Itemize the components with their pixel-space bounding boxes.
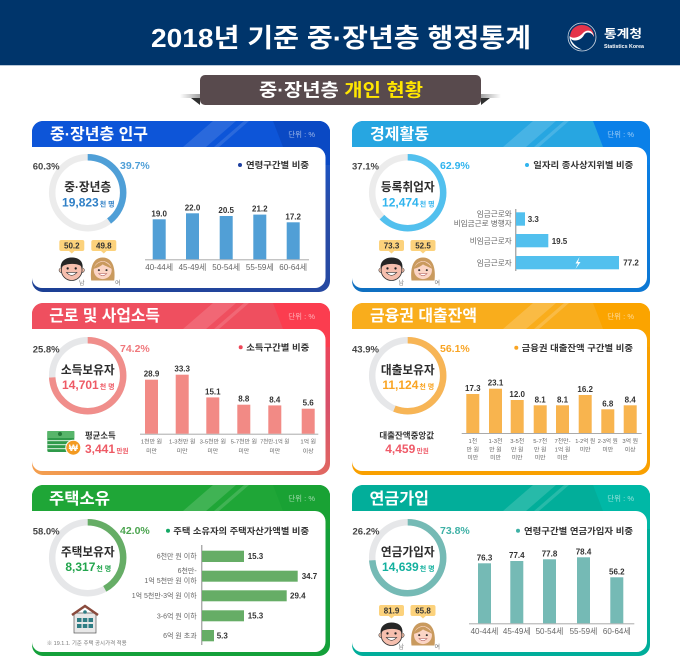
- average income: 평균소득: [85, 431, 116, 441]
- panel heading: 근로 및 사업소득: [49, 307, 160, 325]
- bar chart: 5.3: [217, 632, 228, 640]
- bar chart: 임금근로와: [477, 209, 512, 219]
- bar chart: 6천만-: [178, 566, 197, 575]
- gender ratio: 여: [434, 643, 440, 651]
- bar chart: 임금근로자: [477, 258, 512, 267]
- logo text: [604, 26, 645, 50]
- donut chart: 대출보유자: [381, 363, 435, 377]
- bar chart: [462, 379, 642, 462]
- chart title: 일자리 종사상지위별 비중: [533, 159, 633, 170]
- donut chart: 56.1%: [440, 343, 470, 355]
- donut chart: 등록취업자: [381, 180, 435, 194]
- gender ratio: 50.2: [64, 242, 80, 250]
- bar chart: 15.3: [248, 552, 264, 561]
- chart title: 연령구간별 비중: [246, 159, 309, 170]
- bar chart: 55-59세: [570, 627, 597, 636]
- bar chart: 60-64세: [603, 627, 631, 636]
- donut chart: 73.8%: [440, 525, 470, 537]
- bar chart: 1-3천만 원: [169, 438, 195, 446]
- bar chart: 34.7: [302, 572, 318, 581]
- donut chart: 26.2%: [352, 526, 380, 538]
- gender ratio: 남: [398, 643, 404, 651]
- logo text: 통계청: [604, 26, 642, 40]
- unit: 단위 : %: [288, 129, 315, 139]
- top banner: [0, 0, 680, 66]
- title: 2018년 기준 중·장년층 행정통계: [151, 23, 531, 53]
- footnote: ※ 19.1.1. 기준 주택 공시가격 적용: [47, 639, 127, 647]
- bar chart: 비임금근로자: [470, 237, 512, 246]
- bar chart: 이상: [303, 447, 314, 455]
- bar chart: 17.2: [285, 212, 302, 221]
- donut chart: 중·장년층: [64, 180, 111, 194]
- panel heading: 주택소유: [49, 490, 110, 508]
- donut chart: [33, 157, 150, 228]
- bar chart: 23.1: [488, 379, 504, 388]
- bar chart: 미만: [535, 454, 546, 462]
- bar chart: 미만: [238, 447, 250, 455]
- gender ratio: 여: [434, 279, 440, 287]
- panel heading: 금융권 대출잔액: [370, 307, 477, 325]
- bar chart: 5-7천만 원: [231, 438, 257, 446]
- donut chart: 주택보유자: [61, 546, 115, 559]
- panel: 중·장년층 인구: [32, 121, 330, 292]
- bar chart: 미만: [557, 454, 568, 462]
- gender ratio: 여: [115, 279, 121, 287]
- bar chart: 3-5천만 원: [200, 438, 226, 446]
- donut chart: 37.1%: [352, 162, 379, 172]
- panel heading: 중·장년층 인구: [50, 126, 148, 144]
- bar chart: 12.0: [509, 390, 526, 399]
- bar chart: 미만: [207, 447, 219, 455]
- bar chart: 50-54세: [212, 263, 240, 272]
- donut chart: 43.9%: [352, 344, 379, 356]
- bar chart: [469, 547, 634, 636]
- bar chart: 3.3: [528, 215, 539, 224]
- bar chart: 6천만 원 이하: [157, 552, 197, 560]
- bar chart: 7천만-: [554, 437, 571, 445]
- unit: 단위 : %: [288, 493, 315, 503]
- panel: 경제활동: [352, 121, 650, 292]
- bar chart: 33.3: [174, 365, 191, 374]
- bar chart: 22.0: [185, 203, 201, 212]
- gender ratio: 81.9: [384, 606, 400, 616]
- bar chart: 1천만 원: [141, 438, 162, 446]
- donut chart: [33, 522, 150, 593]
- bar chart: 1-2억 원: [575, 437, 595, 445]
- donut chart: [33, 340, 150, 411]
- bar chart: [132, 545, 318, 645]
- bar chart: 28.9: [144, 370, 160, 379]
- unit: 단위 : %: [607, 311, 634, 321]
- median loan balance: 대출잔액중앙값: [379, 431, 434, 441]
- bar chart: 45-49세: [503, 627, 531, 636]
- bar chart: 15.1: [205, 387, 221, 396]
- donut chart: 연금가입자: [381, 545, 435, 559]
- gender ratio: [59, 240, 121, 287]
- bar chart: 6억 원 초과: [163, 631, 197, 640]
- bar chart: 21.2: [252, 205, 268, 214]
- bar chart: 19.0: [151, 209, 168, 218]
- bar chart: 56.2: [609, 567, 625, 576]
- bar chart: 40-44세: [471, 627, 498, 636]
- bar chart: 7천만-1억 원: [260, 438, 289, 446]
- bar chart: [145, 203, 309, 272]
- donut chart: [352, 157, 470, 228]
- bar chart: 16.2: [577, 385, 594, 394]
- bar chart: 8.1: [557, 395, 569, 404]
- bar chart: 15.3: [248, 612, 264, 621]
- unit: 단위 : %: [607, 129, 634, 139]
- bar chart: 78.4: [576, 547, 592, 556]
- bar chart: 8.1: [535, 395, 546, 404]
- donut chart: 12,474천 명: [382, 195, 435, 209]
- bar chart: 2-3억 원: [598, 437, 618, 445]
- bar chart: 미만: [602, 445, 614, 453]
- bar chart: 77.4: [509, 551, 525, 560]
- bar chart: 40-44세: [145, 263, 173, 272]
- gender ratio: 남: [79, 279, 85, 287]
- bar chart: 77.2: [623, 258, 639, 268]
- bar chart: 60-64세: [279, 263, 307, 272]
- bar chart: 미만: [490, 454, 501, 462]
- median loan balance: 4,459만원: [385, 442, 429, 456]
- average income: [85, 431, 129, 456]
- chart title: 금융권 대출잔액 구간별 비중: [522, 342, 633, 353]
- bar chart: 8.4: [269, 395, 281, 404]
- bar chart: [140, 365, 318, 455]
- donut chart: 42.0%: [120, 525, 150, 537]
- bar chart: 미만: [512, 454, 523, 462]
- donut chart: 14,701천 명: [62, 378, 115, 392]
- bar chart: 미만: [580, 445, 591, 453]
- bar chart: 1억 원: [300, 438, 316, 446]
- bar chart: 77.8: [542, 549, 558, 558]
- bar chart: 17.3: [465, 384, 481, 393]
- bar chart: 20.5: [218, 206, 235, 215]
- bar chart: 6.8: [602, 399, 614, 408]
- bar chart: 55-59세: [246, 263, 274, 272]
- bar chart: 미만: [467, 454, 479, 462]
- gender ratio: 남: [398, 279, 404, 287]
- average income: 3,441만원: [85, 442, 129, 456]
- gender ratio: 73.3: [384, 242, 400, 250]
- bar chart: 1억 5천만 원 이하: [144, 576, 197, 585]
- bar chart: 미만: [177, 447, 188, 455]
- bar chart: 만 원: [534, 445, 546, 453]
- icon: lightning bolt: [576, 257, 580, 269]
- gender ratio: 65.8: [415, 606, 431, 616]
- unit: 단위 : %: [607, 493, 634, 503]
- bar chart: 8.8: [238, 395, 250, 404]
- bar chart: [454, 209, 639, 271]
- bar chart: 만 원: [489, 445, 502, 453]
- donut chart: 39.7%: [120, 160, 150, 172]
- icon: Statistics Korea taegeuk logo: [568, 23, 596, 51]
- panel: 금융권 대출잔액: [352, 303, 650, 475]
- panel: 근로 및 사업소득: [32, 303, 330, 475]
- bar chart: 이상: [625, 445, 636, 453]
- bar chart: 1천: [468, 437, 477, 445]
- chart title: 연령구간별 연금가입자 비중: [524, 525, 633, 536]
- median loan balance: [379, 431, 434, 456]
- donut chart: 25.8%: [33, 344, 60, 356]
- bar chart: 1억 5천만-3억 원 이하: [132, 591, 197, 600]
- icon: banknotes and won coin: ₩: [69, 443, 78, 454]
- section ribbon: [180, 75, 501, 105]
- bar chart: 50-54세: [536, 627, 563, 636]
- chart title: 소득구간별 비중: [246, 342, 309, 352]
- gender ratio: [379, 605, 440, 651]
- donut chart: [352, 522, 470, 593]
- bar chart: 8.4: [625, 395, 636, 404]
- panel: 연금가입: [352, 485, 650, 656]
- bar chart: 1억 원: [555, 445, 570, 453]
- donut chart: 60.3%: [33, 162, 60, 172]
- ribbon text: 중·장년층 개인 현황: [259, 80, 423, 100]
- donut chart: 14,639천 명: [382, 560, 435, 574]
- panel: 주택소유: [32, 485, 330, 656]
- gender ratio: [379, 240, 440, 287]
- chart title: 주택 소유자의 주택자산가액별 비중: [173, 525, 309, 536]
- donut chart: 소득보유자: [61, 364, 115, 377]
- bar chart: 5.6: [303, 399, 314, 408]
- bar chart: 미만: [269, 447, 281, 455]
- bar chart: 3-5천: [510, 437, 524, 445]
- bar chart: 만 원: [511, 445, 523, 453]
- bar chart: 3-6억 원 이하: [157, 612, 197, 620]
- bar chart: 3억 원: [622, 437, 638, 445]
- icon: banknotes and won coin: [47, 431, 81, 455]
- bar chart: 19.5: [552, 237, 568, 246]
- panel heading: 연금가입: [370, 490, 429, 508]
- panel heading: 경제활동: [370, 126, 429, 144]
- donut chart: 62.9%: [440, 160, 470, 172]
- donut chart: 58.0%: [33, 526, 60, 538]
- bar chart: 만 원: [467, 445, 479, 453]
- donut chart: [352, 340, 470, 411]
- donut chart: 11,124천 명: [382, 378, 434, 392]
- bar chart: 76.3: [477, 553, 493, 562]
- bar chart: 29.4: [290, 592, 306, 601]
- logo text: Statistics Korea: [604, 44, 645, 50]
- gender ratio: 52.5: [415, 242, 431, 250]
- donut chart: 8,317천 명: [65, 560, 111, 574]
- bar chart: 비임금근로 병행자: [454, 218, 512, 228]
- donut chart: 74.2%: [120, 343, 150, 355]
- bar chart: 1-3천: [489, 437, 502, 445]
- bar chart: 미만: [146, 447, 157, 455]
- unit: 단위 : %: [288, 311, 315, 321]
- donut chart: 19,823천 명: [62, 195, 115, 209]
- gender ratio: 49.8: [96, 242, 112, 250]
- bar chart: 5-7천: [533, 437, 547, 445]
- bar chart: 45-49세: [179, 263, 206, 272]
- icon: house: [72, 606, 98, 633]
